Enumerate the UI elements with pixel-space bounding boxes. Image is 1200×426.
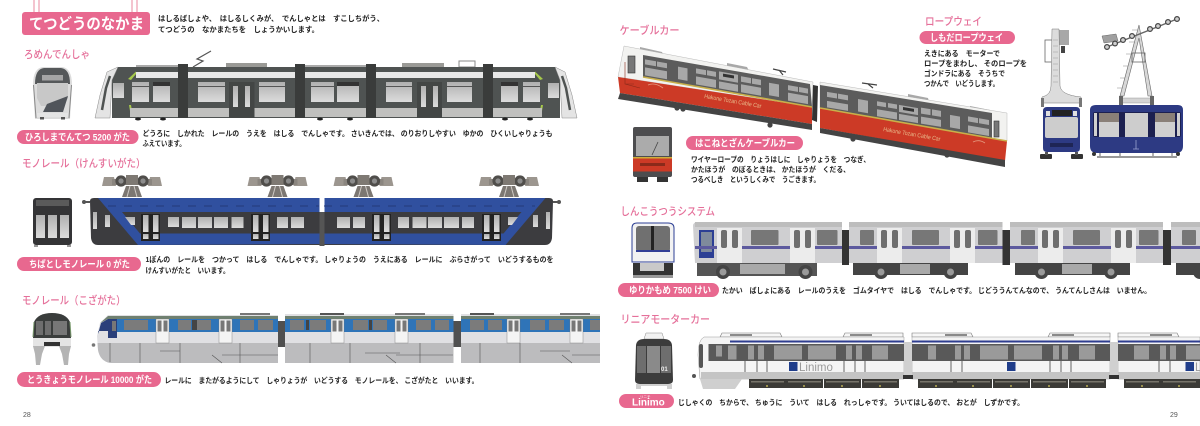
heading: linear motor car: リニアモーターカー — [620, 313, 710, 326]
description: cable car — [691, 155, 870, 184]
pill: Chiba: ちばとしモノレール 0 がた — [29, 258, 130, 270]
ropeway gondola front — [1040, 29, 1083, 159]
title sign: てつどうのなかま — [29, 15, 144, 33]
description: ropeway: ロープをまわし、 そのロープを — [924, 59, 1027, 68]
description: suspended monorail: 1ぽんの レールを つかって はしる でんしゃです。 しゃりょうの うえにある レールに ぶらさがって いどうするものを — [146, 255, 554, 264]
lower car: Hakone Tozan Cable Car — [704, 94, 762, 110]
page number 28: 28 — [23, 412, 31, 419]
Linimo side view: Linimo — [799, 362, 833, 374]
description: Linimo: じしゃくの ちからで、 ちゅうに ういて はしる れっしゃです。 ういてはしるので、 おとが しずかです。 — [678, 398, 1024, 407]
icon: Linimo front — [635, 333, 673, 389]
heading: straddle monorail: モノレール（こざがた） — [22, 293, 126, 307]
description: tram — [142, 129, 552, 148]
description: cable car: つるべしき というしくみで うごきます。 — [691, 175, 820, 184]
pill: Linimo: Linimo — [632, 398, 665, 408]
icon: new transit front — [632, 223, 674, 278]
description: tram: どうろに しかれた レールの うえを はしる でんしゃです。 さいきんでは、 のりおりしやすい ゆかの ひくいしゃりょうも — [142, 129, 552, 138]
intro text: てつどうの なかまたちを しょうかいします。 — [158, 25, 319, 34]
suspended monorail side view — [82, 175, 561, 246]
description: ropeway: つかんで いどうします。 — [924, 79, 999, 88]
description: suspended monorail — [146, 255, 554, 275]
Linimo side view — [692, 333, 1200, 389]
pill: Chiba — [17, 257, 141, 271]
icon: Linimo front: 01 — [661, 367, 668, 373]
heading: ropeway: ロープウェイ — [925, 15, 982, 28]
description: cable car: ワイヤーロープの りょうはしに しゃりょうを つなぎ、 — [691, 155, 870, 164]
description: suspended monorail: けんすいがたと いいます。 — [146, 266, 230, 275]
description: tram: ふえています。 — [142, 139, 186, 148]
cable car side view — [618, 46, 1007, 167]
icon: suspended monorail front — [33, 198, 72, 247]
heading: new transit: しんこうつうシステム — [620, 205, 715, 218]
tram side view — [95, 51, 577, 120]
pill: Linimo: リニモ — [640, 395, 651, 399]
page 28 — [17, 0, 600, 419]
icon: straddle monorail front — [33, 313, 71, 365]
pill: Hakone: はこねとざんケーブルカー — [695, 138, 795, 150]
pill: Yurikamome — [618, 283, 719, 297]
heading: tram: ろめんでんしゃ — [24, 48, 90, 61]
page 29 — [618, 15, 1200, 419]
upper car: Hakone Tozan Cable Car — [883, 127, 941, 143]
pill: Yurikamome: ゆりかもめ 7500 けい — [629, 286, 711, 296]
description: ropeway: ゴンドラにある そうちで — [924, 69, 1005, 78]
heading: cable car: ケーブルカー — [620, 23, 680, 37]
title sign — [22, 0, 150, 35]
description: straddle monorail: レールに またがるようにして しゃりょうが いどうする モノレールを、 こざがたと いいます。 — [164, 376, 478, 385]
pill: Linimo — [619, 394, 674, 408]
pill: Hiroshima: ひろしまでんてつ 5200 がた — [25, 132, 130, 144]
ropeway gondola side — [1090, 17, 1183, 158]
pill: Tokyo: とうきょうモノレール 10000 がた — [27, 374, 152, 386]
intro text — [158, 14, 384, 34]
straddle monorail side view — [92, 313, 600, 363]
pill: Shimoda: しもだロープウェイ — [930, 33, 1003, 44]
description: cable car: かたほうが のぼるときは、 かたほうが くだる、 — [691, 165, 850, 174]
lower car — [618, 46, 818, 130]
page number 29: 29 — [1170, 412, 1178, 419]
description: ropeway: えきにある モーターで — [924, 49, 1000, 58]
upper car — [820, 82, 1007, 167]
new transit side view — [693, 222, 1200, 279]
icon: cable car front — [633, 127, 672, 182]
intro text: はしるばしょや、 はしるしくみが、 でんしゃとは すこしちがう、 — [158, 14, 384, 23]
description: new transit: たかい ばしょにある レールのうえを ゴムタイヤで はしる でんしゃです。 じどううんてんなので、 うんてんしさんは いません。 — [722, 286, 1151, 295]
description: ropeway — [924, 49, 1027, 88]
heading: suspended monorail: モノレール（けんすいがた） — [22, 156, 146, 170]
pill: Tokyo — [17, 372, 161, 387]
icon: tram front — [33, 67, 72, 120]
